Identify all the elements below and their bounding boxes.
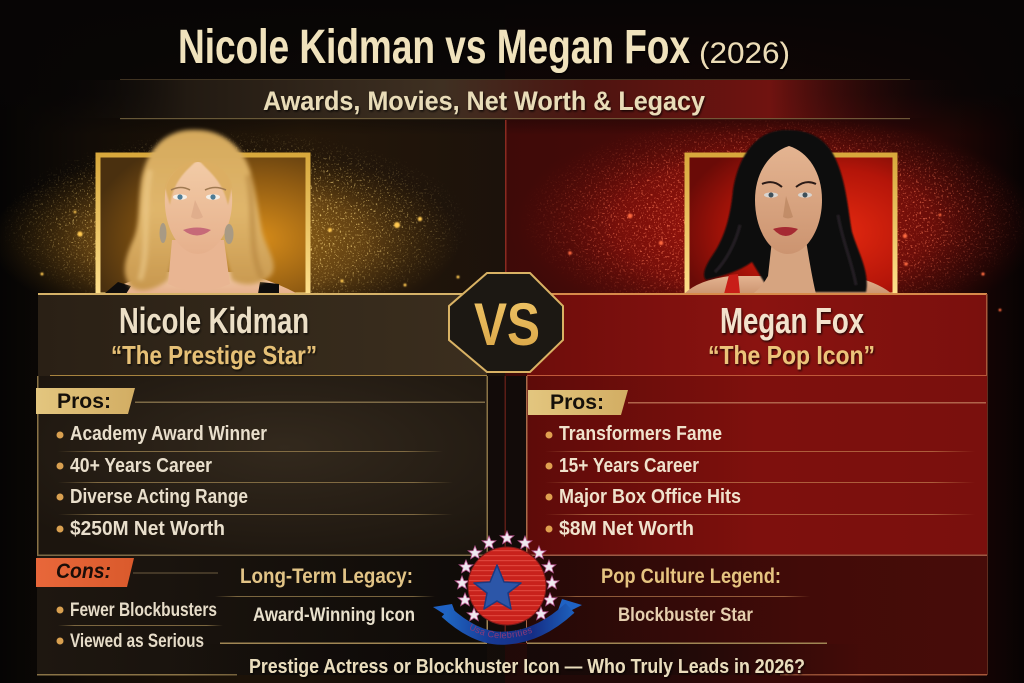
emblem red disc (468, 547, 546, 625)
cons and legacy section: Nicole Kidman (36, 554, 487, 676)
list: Nicole Kidman pros: Academy Award Winner (70, 423, 267, 445)
title: Nicole Kidman vs Megan Fox (178, 21, 690, 74)
list: Nicole Kidman pros (56, 423, 267, 540)
legacy section: Megan Fox: Pop Culture Legend: (601, 565, 781, 588)
bright sparkles (40, 211, 1001, 311)
emblem blue star (474, 565, 521, 609)
list: Nicole Kidman pros: Diverse Acting Range (70, 486, 248, 508)
bottom strip (180, 644, 860, 683)
list: Nicole Kidman pros: 40+ Years Career (70, 455, 212, 477)
emblem: USA Celebrities (433, 530, 582, 645)
list: Megan Fox pros: Major Box Office Hits (559, 486, 741, 508)
name header: Megan Fox: “The Pop Icon” (708, 340, 875, 370)
subtitle band (60, 79, 970, 119)
emblem ribbon (433, 599, 582, 645)
pros section: Nicole Kidman (36, 376, 488, 675)
list: Nicole Kidman cons (56, 600, 217, 652)
tag: Pros: Pros: (57, 390, 111, 413)
list: Megan Fox pros (546, 423, 741, 540)
tag: Cons: Cons: (56, 560, 111, 583)
panel: Nicole Kidman (36, 293, 488, 676)
name header: Nicole Kidman: “The Prestige Star” (111, 340, 317, 370)
portrait: Nicole Kidman (104, 130, 298, 294)
VS octagon badge: VS (474, 291, 540, 358)
VS octagon badge (449, 273, 563, 372)
tag: Pros (528, 390, 628, 415)
bottom tagline: Prestige Actress or Blockhuster Icon — Who Truly Leads in 2026? (249, 656, 805, 678)
list: Nicole Kidman cons: Viewed as Serious (70, 631, 204, 652)
name header: Nicole Kidman: Nicole Kidman (119, 300, 309, 341)
list: Megan Fox pros: 15+ Years Career (559, 455, 699, 477)
pros section: Megan Fox (526, 376, 987, 643)
list: Nicole Kidman cons: Fewer Blockbusters (70, 600, 217, 621)
center divider column (486, 376, 526, 643)
list: Megan Fox pros: Transformers Fame (559, 423, 722, 445)
portrait frame: Nicole Kidman (98, 155, 308, 295)
legacy section: Megan Fox (527, 554, 987, 676)
name header: Megan Fox (527, 293, 988, 675)
legacy: Long-Term Legacy (240, 565, 415, 626)
emblem ribbon: Usa Celebrities (470, 624, 532, 638)
list: Megan Fox pros: $8M Net Worth (559, 518, 694, 540)
tag: Pros: Pros: (550, 391, 604, 414)
legacy: Long-Term Legacy: Award-Winning Icon (253, 605, 415, 626)
sparkle particles: gold (6, 132, 462, 293)
tag: Pros (36, 388, 135, 414)
title: (2026) (699, 37, 790, 70)
tag: Cons (36, 558, 134, 587)
list: Nicole Kidman pros: $250M Net Worth (70, 518, 225, 540)
sparkle particles: red (528, 120, 1023, 293)
legacy: Long-Term Legacy: Long-Term Legacy: (240, 565, 413, 588)
panel: Megan Fox (526, 293, 988, 676)
name header: Megan Fox: Megan Fox (720, 300, 864, 341)
legacy section: Megan Fox: Blockbuster Star (618, 605, 754, 626)
subtitle band: Awards, Movies, Net Worth & Legacy (263, 86, 705, 116)
emblem star ring (455, 531, 559, 621)
portrait: Megan Fox (684, 130, 892, 294)
portrait frame: Megan Fox (687, 155, 895, 295)
name header: Nicole Kidman (38, 293, 487, 376)
